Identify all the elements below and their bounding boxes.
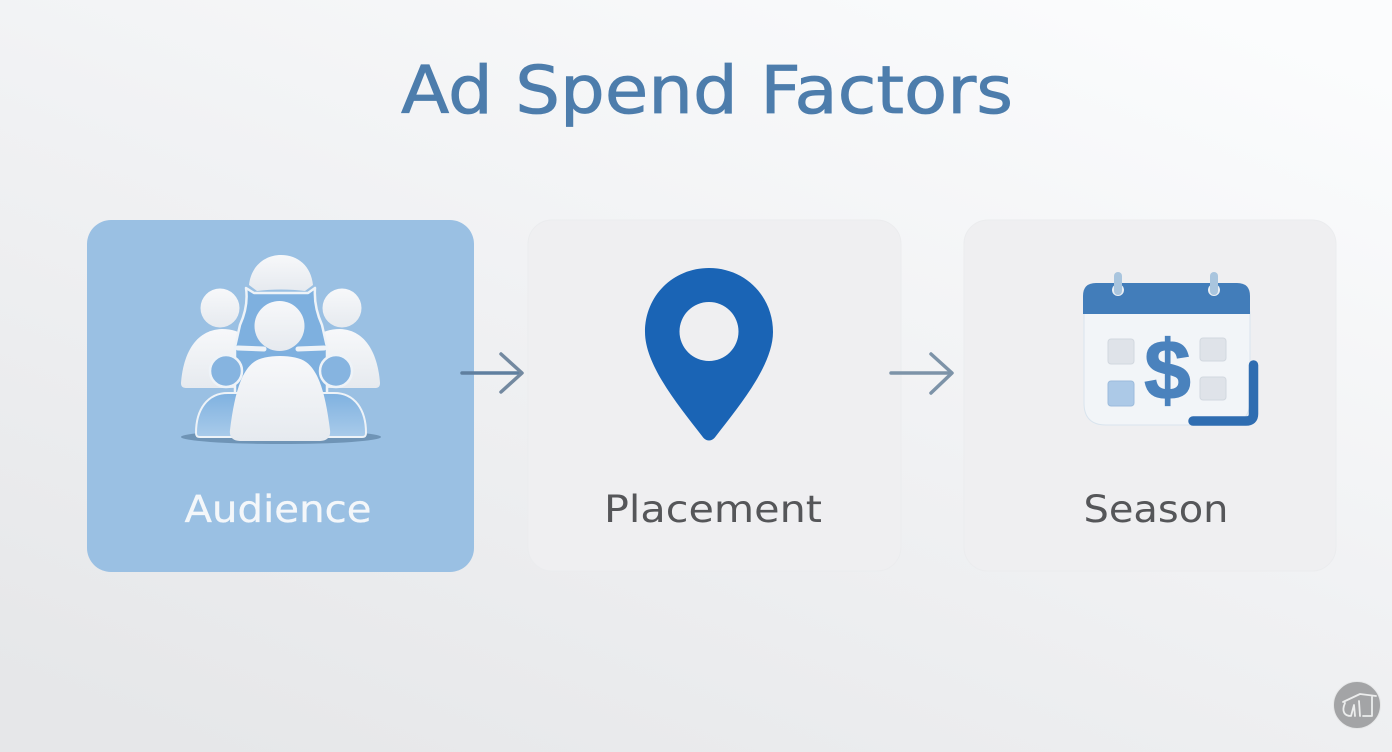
label: season: Season bbox=[1084, 488, 1228, 531]
icon: location pin bbox=[645, 268, 773, 440]
panel: season bbox=[964, 220, 1336, 571]
panel: placement bbox=[528, 220, 901, 571]
front small right person bbox=[314, 355, 366, 437]
back centre person bbox=[235, 255, 327, 395]
back left person bbox=[181, 288, 246, 388]
label: audience: Audience bbox=[184, 488, 372, 531]
calendar cells bbox=[1108, 338, 1226, 406]
icon: calendar with dollar bbox=[1083, 272, 1254, 425]
label: placement: Placement bbox=[604, 488, 822, 531]
dollar sign: $ bbox=[1144, 323, 1191, 417]
title: Ad Spend Factors bbox=[401, 52, 1013, 129]
panel: audience bbox=[87, 220, 474, 572]
arrow: audience to placement bbox=[462, 354, 522, 392]
front centre person bbox=[230, 301, 330, 441]
icon: audience group bbox=[181, 255, 381, 444]
front small left person bbox=[196, 355, 248, 437]
arrow: placement to season bbox=[891, 354, 952, 393]
corner bracket bbox=[1193, 365, 1254, 421]
calendar rings bbox=[1112, 272, 1220, 296]
back right person bbox=[316, 288, 380, 388]
watermark badge bbox=[1334, 682, 1380, 728]
